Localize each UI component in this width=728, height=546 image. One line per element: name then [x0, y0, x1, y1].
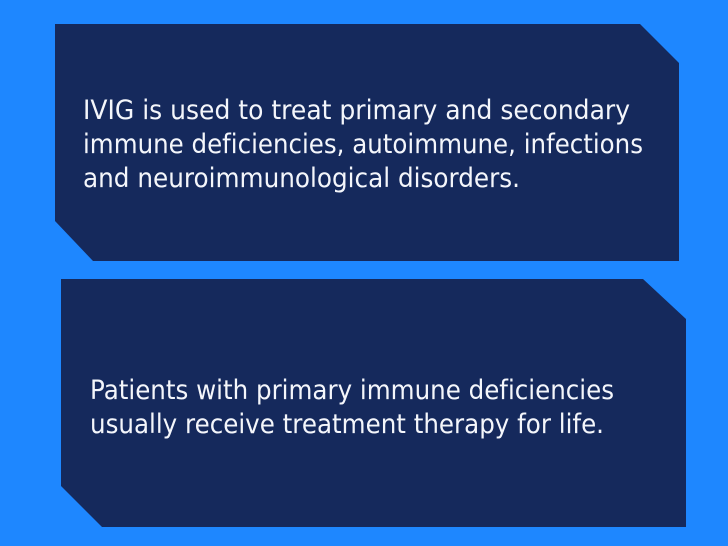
- panel: IVIG uses: [55, 24, 679, 261]
- text block: IVIG uses: and neuroimmunological disorders.: [83, 163, 520, 194]
- text block: lifelong therapy: [90, 375, 614, 440]
- panel background: top chamfered box: [55, 24, 679, 261]
- text block: IVIG uses: [83, 95, 643, 194]
- panel: lifelong therapy: [61, 279, 686, 527]
- text block: lifelong therapy: Patients with primary immune deficiencies: [90, 375, 614, 406]
- text block: lifelong therapy: usually receive treatment therapy for life.: [90, 409, 604, 440]
- text block: IVIG uses: IVIG is used to treat primary and secondary: [83, 95, 630, 126]
- text block: IVIG uses: immune deficiencies, autoimmune, infections: [83, 129, 643, 160]
- panel background: bottom chamfered box: [61, 279, 686, 527]
